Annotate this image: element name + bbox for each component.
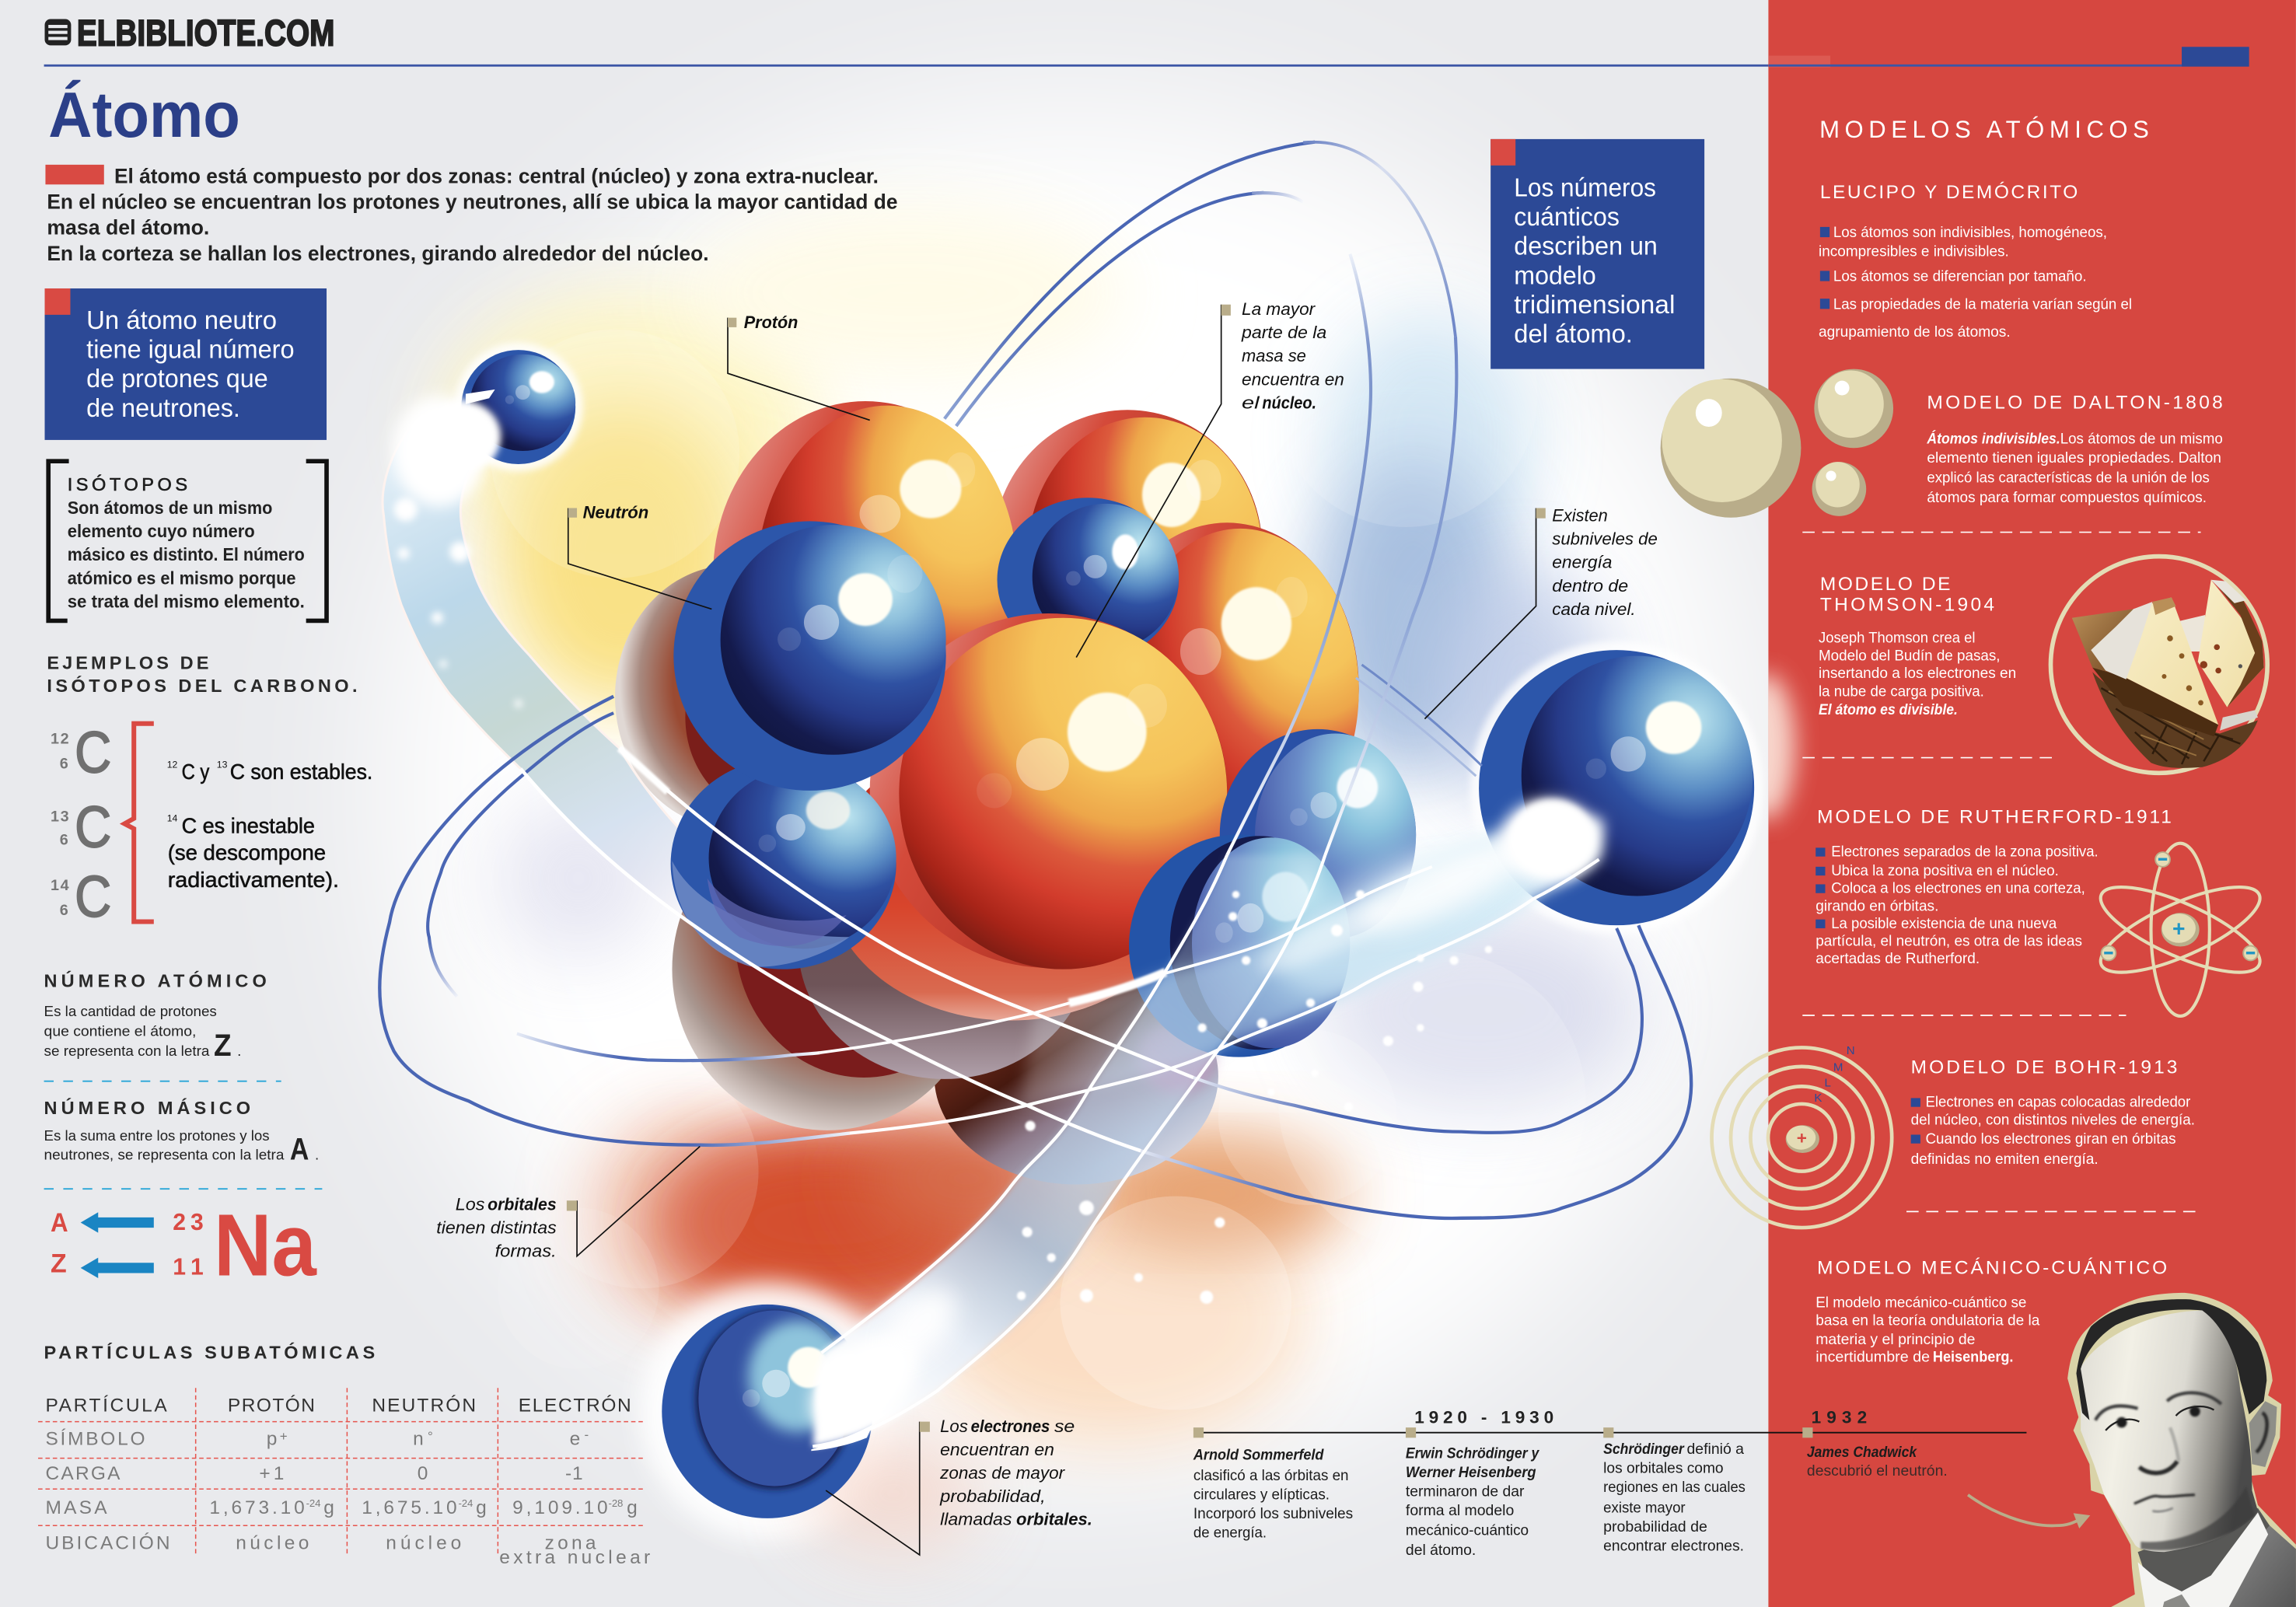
event: chadwick (1807, 1445, 1948, 1479)
arrow: A (81, 1212, 154, 1233)
section: dalton: explicó las características de la unión de los (1927, 470, 2210, 487)
heading: ejemplos de isotopos: ISÓTOPOS DEL CARBONO. (47, 675, 358, 696)
label: nucleus mass: masa se (1242, 346, 1306, 365)
intro text block: El átomo está compuesto por dos zonas: central (núcleo) y zona extra-nuclear. (114, 164, 879, 187)
table: particulas subatomicas: g (323, 1497, 334, 1518)
section: thomson: MODELO DE (1820, 574, 1950, 595)
section: rutherford: Coloca a los electrones en una corteza, (1831, 881, 2085, 897)
label: subniveles: dentro de (1552, 576, 1628, 596)
section: leucipo y democrito: LEUCIPO Y DEMÓCRITO (1820, 182, 2078, 203)
nose (2139, 1461, 2177, 1473)
inner path (428, 713, 613, 997)
icon: rutherford atom: + (2172, 916, 2186, 941)
callout: numeros cuanticos (1490, 139, 1704, 369)
event: chadwick: James Chadwick (1807, 1445, 1917, 1461)
carbon isotopes (51, 719, 111, 929)
label: nucleus mass: núcleo. (1262, 393, 1316, 412)
numero masico: Es la suma entre los protones y los (44, 1127, 270, 1144)
icon: bohr atom: N (1847, 1044, 1855, 1057)
section: leucipo y democrito: Los átomos son indivisibles, homogéneos, (1833, 225, 2107, 241)
carbon isotopes: 13 (51, 808, 69, 825)
section: rutherford: Ubica la zona positiva en el núcleo. (1831, 863, 2059, 879)
table: particulas subatomicas: 1,675.10 (362, 1497, 457, 1518)
callout: numeros cuanticos: modelo (1514, 260, 1596, 289)
label: subniveles: energía (1552, 553, 1612, 572)
numero masico: NÚMERO MÁSICO (44, 1097, 250, 1118)
label: neutron (568, 503, 711, 609)
section: rutherford: MODELO DE RUTHERFORD-1911 (1817, 806, 2172, 827)
event: schrodinger y heisenberg: Erwin Schrödinger y (1406, 1446, 1540, 1462)
electron: top left (393, 343, 583, 507)
label: electrones: encuentran en (940, 1440, 1054, 1459)
label: electrones: llamadas (940, 1509, 1012, 1528)
face (2081, 1310, 2258, 1552)
event: sommerfeld: circulares y elípticas. (1193, 1486, 1330, 1503)
event: sommerfeld: Incorporó los subniveles (1193, 1506, 1353, 1522)
event: orbitales: Schrödinger (1603, 1441, 1685, 1458)
label: electrones: orbitales. (1016, 1509, 1092, 1528)
comet: bottom (813, 855, 1325, 1447)
sodium notation: 11 (173, 1254, 204, 1280)
section: thomson: la nube de carga positiva. (1819, 683, 1984, 700)
logo icon (45, 19, 71, 45)
panel: isotopos: elemento cuyo número (68, 521, 255, 541)
event: schrodinger y heisenberg (1406, 1446, 1540, 1559)
neck (2138, 1508, 2270, 1603)
icon: bohr atom: M (1833, 1061, 1843, 1074)
carbon isotopes: 6 (60, 756, 68, 773)
callout: numeros cuanticos: Los números (1514, 173, 1656, 201)
event: sommerfeld: clasificó a las órbitas en (1193, 1468, 1348, 1484)
event: chadwick: descubrió el neutrón. (1807, 1463, 1948, 1479)
red marker (45, 165, 104, 184)
section: leucipo y democrito (1819, 182, 2132, 341)
isotope notes: C y (182, 760, 210, 784)
arrow: Z (81, 1258, 154, 1278)
date: 1932: 1932 (1812, 1407, 1867, 1427)
heading: modelos atomicos: MODELOS ATÓMICOS (1819, 116, 2149, 143)
proton P3 (1096, 522, 1359, 854)
icon: bohr atom (1712, 1044, 1892, 1228)
brows (2095, 1406, 2138, 1420)
event: sommerfeld: Arnold Sommerfeld (1193, 1448, 1325, 1464)
section: leucipo y democrito: agrupamiento de los átomos. (1819, 324, 2011, 341)
sparkles (1017, 890, 1492, 1304)
carbon isotopes: 14 (51, 877, 69, 894)
left slice crumb (2123, 597, 2218, 725)
isotope notes: 14 (167, 812, 178, 823)
section: rutherford: girando en órbitas. (1815, 898, 1938, 914)
table: particulas subatomicas: ° (428, 1429, 433, 1444)
table: particulas subatomicas (38, 1388, 650, 1568)
heading: ejemplos de isotopos: EJEMPLOS DE (47, 653, 208, 673)
outer path (379, 697, 849, 1145)
label: orbitales: orbitales (488, 1194, 557, 1214)
bokeh (524, 1054, 759, 1288)
table: particulas subatomicas: extra nuclear (499, 1547, 650, 1568)
electron: right (1470, 641, 1763, 934)
event: orbitales: existe mayor (1603, 1500, 1686, 1516)
logo: ELBIBLIOTE.COM (77, 12, 334, 53)
table: particulas subatomicas: e (570, 1429, 580, 1450)
mouth (2134, 1495, 2195, 1504)
hair (2076, 1299, 2266, 1420)
panel: isotopos (48, 461, 327, 620)
label: electrones: Los (940, 1417, 968, 1436)
callout: neutral atom (45, 288, 327, 440)
jaw shading (2140, 1486, 2255, 1550)
numero masico: neutrones, se representa con la letra (44, 1146, 285, 1162)
section: thomson (1819, 574, 2016, 718)
comet ribbon: left (383, 416, 732, 930)
event: sommerfeld (1193, 1448, 1353, 1541)
section: mecanico cuantico: materia y el principio de (1815, 1332, 1976, 1348)
orbit: tall ellipse (813, 142, 1456, 1447)
label: nucleus mass (1076, 299, 1344, 658)
callout: neutral atom: Un átomo neutro (86, 306, 277, 334)
table: particulas subatomicas: 1,673.10 (209, 1497, 305, 1518)
sodium notation: Z (51, 1249, 67, 1279)
section: bohr: del núcleo, con distintos niveles de energía. (1911, 1112, 2195, 1128)
callout: numeros cuanticos: tridimensional (1514, 290, 1675, 319)
table: particulas subatomicas: UBICACIÓN (45, 1532, 170, 1553)
sodium notation: 23 (173, 1210, 204, 1235)
intro text block: masa del átomo. (47, 215, 209, 239)
callout: numeros cuanticos: del átomo. (1514, 320, 1633, 348)
table: particulas subatomicas: núcleo (386, 1532, 461, 1553)
red panel soft glare (1768, 659, 1812, 833)
section: dalton: Los átomos de un mismo (2060, 431, 2223, 448)
orbit: right loop (521, 665, 1691, 1218)
section: mecanico cuantico: Heisenberg. (1933, 1349, 2013, 1365)
callout: numeros cuanticos: cuánticos (1514, 202, 1620, 231)
isotope notes: C son estables. (230, 760, 372, 784)
callout: neutral atom: de neutrones. (86, 393, 240, 422)
label: orbitales (436, 1147, 700, 1261)
label: subniveles: subniveles de (1552, 529, 1658, 549)
numero atomico: NÚMERO ATÓMICO (44, 969, 267, 990)
section: rutherford: acertadas de Rutherford. (1815, 951, 1980, 967)
callout: neutral atom: tiene igual número (86, 334, 295, 363)
numero masico: A (290, 1132, 309, 1166)
jacket (2228, 1524, 2296, 1607)
numero atomico: se representa con la letra (44, 1043, 210, 1059)
event: schrodinger y heisenberg: terminaron de dar (1406, 1484, 1525, 1500)
section: mecanico cuantico: basa en la teoría ondulatoria de la (1815, 1312, 2040, 1329)
label: orbitales: tienen distintas (436, 1218, 557, 1238)
section: thomson: Modelo del Budín de pasas, (1819, 648, 2001, 664)
back sphere bottom (935, 968, 1218, 1185)
carbon isotopes: 6 (60, 832, 68, 849)
event: schrodinger y heisenberg: del átomo. (1406, 1542, 1476, 1559)
table: particulas subatomicas: -28 (609, 1497, 623, 1509)
red brace (124, 724, 154, 921)
sodium notation: A (51, 1208, 68, 1238)
event: schrodinger y heisenberg: forma al modelo (1406, 1503, 1514, 1519)
neutron N1 (673, 521, 946, 791)
proton lower under P4 (827, 736, 1193, 1021)
event: orbitales: probabilidad de (1603, 1519, 1707, 1535)
section: rutherford (1815, 806, 2172, 967)
numero atomico (44, 969, 267, 1063)
icon: bohr atom: K (1814, 1092, 1822, 1105)
table: particulas subatomicas: -24 (306, 1497, 320, 1509)
orbit glare and comets (792, 799, 1603, 1452)
section: bohr: Cuando los electrones giran en órbitas (1925, 1131, 2176, 1148)
section: leucipo y democrito: Los átomos se diferencian por tamaño. (1833, 269, 2087, 285)
basket (2092, 672, 2258, 768)
dalton spheres (1661, 369, 1893, 518)
right slice (2198, 580, 2263, 707)
event: orbitales: los orbitales como (1603, 1460, 1724, 1476)
label: proton: Protón (744, 313, 798, 332)
carbon isotopes: C (75, 864, 111, 929)
section: dalton: Átomos indivisibles. (1926, 431, 2060, 448)
label: electrones: zonas de mayor (939, 1463, 1066, 1483)
table: particulas subatomicas: + (280, 1429, 288, 1444)
header accents (1769, 47, 2249, 68)
timeline (1193, 1407, 2026, 1559)
section: thomson: Joseph Thomson crea el (1819, 631, 1976, 647)
table: particulas subatomicas: 9,109.10 (512, 1497, 608, 1518)
label: orbitales: Los (456, 1194, 484, 1214)
title rule (44, 65, 2182, 67)
panel: isotopos: ISÓTOPOS (68, 474, 187, 494)
event: schrodinger y heisenberg: Werner Heisenberg (1406, 1465, 1536, 1481)
table: particulas subatomicas: núcleo (236, 1532, 309, 1553)
table: particulas subatomicas: -1 (565, 1463, 583, 1484)
table: particulas subatomicas: - (584, 1427, 589, 1442)
event: orbitales: regiones en las cuales (1603, 1479, 1746, 1496)
icon: bohr atom: + (1797, 1129, 1807, 1148)
callout: numeros cuanticos: describen un (1514, 232, 1658, 260)
label: electrones: electrones (971, 1417, 1050, 1436)
event: orbitales: definió a (1687, 1441, 1744, 1458)
table: particulas subatomicas: MASA (45, 1497, 107, 1518)
sodium notation: Na (214, 1196, 317, 1294)
label: nucleus mass: La mayor (1242, 299, 1316, 319)
table: particulas subatomicas: -24 (459, 1497, 473, 1509)
section: thomson: insertando a los electrones en (1819, 666, 2016, 682)
table: particulas subatomicas: g (627, 1497, 638, 1518)
isotope notes: C es inestable (182, 814, 315, 838)
section: bohr: Electrones en capas colocadas alrededor (1925, 1095, 2191, 1111)
section: bohr: MODELO DE BOHR-1913 (1911, 1057, 2177, 1078)
label: nucleus mass: parte de la (1241, 323, 1326, 342)
table: particulas subatomicas: g (476, 1497, 487, 1518)
table: particulas subatomicas: +1 (259, 1463, 284, 1484)
panel: isotopos: Son átomos de un mismo (68, 498, 272, 518)
nucleus back spheres (615, 565, 1218, 1185)
title: Átomo (48, 79, 240, 151)
carbon isotopes: 6 (60, 902, 68, 919)
section: rutherford: La posible existencia de una nueva (1831, 916, 2057, 932)
table: particulas subatomicas: n (413, 1429, 424, 1450)
label: subniveles: Existen (1552, 505, 1608, 525)
label: nucleus mass: el (1242, 393, 1260, 412)
table: particulas subatomicas: PROTÓN (228, 1395, 315, 1416)
isotope notes: 13 (217, 760, 228, 770)
date: 1920-1930: 1920 - 1930 (1414, 1407, 1553, 1427)
eyes (2106, 1420, 2139, 1431)
panel: isotopos: atómico es el mismo porque (68, 568, 295, 588)
cloth (2175, 615, 2205, 652)
arrow: to portrait (1968, 1495, 2090, 1528)
label: electrones (826, 1417, 1092, 1555)
heading: ejemplos de isotopos (47, 653, 358, 696)
section: bohr (1911, 1057, 2195, 1168)
cream outline (2067, 1293, 2296, 1607)
table: particulas subatomicas: NEUTRÓN (372, 1395, 476, 1416)
section: mecanico cuantico: MODELO MECÁNICO-CUÁNTICO (1817, 1257, 2167, 1278)
isotope notes (167, 760, 372, 892)
orbit: lower ellipse (379, 697, 1599, 1145)
icon: bohr atom: L (1825, 1076, 1831, 1089)
table: particulas subatomicas: 0 (418, 1463, 428, 1484)
callout: neutral atom: de protones que (86, 364, 268, 393)
proton P1 (713, 401, 1018, 748)
intro text block (45, 164, 897, 265)
sodium notation (51, 1196, 317, 1294)
table: particulas subatomicas: SÍMBOLO (45, 1429, 145, 1450)
isotope notes: radiactivamente). (168, 868, 339, 892)
proton P2 (993, 410, 1262, 690)
label: electrones: probabilidad, (939, 1486, 1046, 1506)
label: electrones: se (1054, 1417, 1075, 1436)
label: nucleus mass: encuentra en (1242, 369, 1344, 389)
label: neutron: Neutrón (583, 503, 648, 522)
numero atomico: Z (214, 1029, 232, 1063)
table: particulas subatomicas: CARGA (45, 1463, 121, 1484)
section: dalton (1926, 392, 2223, 506)
back sphere lower large (672, 796, 1091, 1130)
neutron N2 (998, 498, 1179, 662)
table: particulas subatomicas: p (267, 1429, 277, 1450)
event: orbitales (1603, 1441, 1746, 1554)
icon: rutherford atom (2091, 844, 2270, 1016)
table: particulas subatomicas: ELECTRÓN (519, 1395, 631, 1416)
panel: isotopos: másico es distinto. El número (68, 544, 305, 564)
section: dalton: MODELO DE DALTON-1808 (1927, 392, 2223, 413)
intro text block: En el núcleo se encuentran los protones y neutrones, allí se ubica la mayor cantidad de (47, 190, 897, 214)
event: orbitales: encontrar electrones. (1603, 1538, 1744, 1554)
carbon isotopes: C (75, 794, 111, 859)
label: proton (728, 313, 870, 420)
tie (2163, 1595, 2190, 1607)
section: dalton: átomos para formar compuestos químicos. (1927, 490, 2207, 506)
section: thomson: THOMSON-1904 (1820, 594, 1994, 615)
numero atomico: que contiene el átomo, (44, 1023, 196, 1039)
table: particulas subatomicas: PARTÍCULA (45, 1395, 167, 1416)
neutron N5 (1129, 834, 1350, 1057)
label: orbitales: formas. (495, 1242, 557, 1261)
numero masico: . (315, 1146, 319, 1162)
section: leucipo y democrito: Las propiedades de la materia varían según el (1833, 296, 2132, 313)
event: sommerfeld: de energía. (1193, 1525, 1267, 1541)
section: bohr: definidas no emiten energía. (1911, 1151, 2099, 1168)
panel: modelos atomicos background (1768, 0, 2296, 1607)
section: rutherford: partícula, el neutrón, es otra de las ideas (1815, 934, 2082, 950)
collar (2138, 1512, 2268, 1607)
electron comet white bites (817, 799, 1593, 1429)
section: mecanico cuantico (1815, 1257, 2167, 1365)
numero masico (44, 1097, 319, 1166)
carbon isotopes: C (75, 719, 111, 784)
table: particulas subatomicas: zona (545, 1532, 596, 1553)
table heading: PARTÍCULAS SUBATÓMICAS (44, 1342, 375, 1363)
electron: bottom (662, 1305, 872, 1518)
section: thomson: El átomo es divisible. (1819, 702, 1958, 718)
intro text block: En la corteza se hallan los electrones, girando alrededor del núcleo. (47, 242, 709, 265)
ear (2249, 1401, 2277, 1467)
isotope notes: (se descompone (168, 840, 326, 865)
section: leucipo y democrito: incompresibles e indivisibles. (1819, 244, 2009, 260)
numero atomico: Es la cantidad de protones (44, 1003, 217, 1019)
numero atomico: . (237, 1043, 241, 1059)
label: subniveles (1424, 505, 1658, 719)
event: schrodinger y heisenberg: mecánico-cuántico (1406, 1523, 1529, 1539)
neutron N4 (1220, 729, 1416, 940)
section: mecanico cuantico: El modelo mecánico-cuántico se (1815, 1295, 2026, 1312)
isotope notes: 12 (167, 760, 178, 770)
portrait: James Chadwick (2067, 1293, 2296, 1607)
neutron N3 (671, 758, 896, 969)
section: rutherford: Electrones separados de la zona positiva. (1831, 844, 2099, 861)
left slice crust (2072, 609, 2133, 676)
section: dalton: elemento tienen iguales propiedades. Dalton (1927, 450, 2221, 466)
photo: raisin bread (2050, 557, 2267, 773)
label: subniveles: cada nivel. (1552, 599, 1636, 619)
proton P4 central (870, 613, 1227, 969)
back sphere left (615, 565, 867, 829)
section: mecanico cuantico: incertidumbre de (1815, 1349, 1930, 1365)
panel: isotopos: se trata del mismo elemento. (68, 592, 305, 612)
carbon isotopes: 12 (51, 731, 69, 748)
comet: right (1021, 818, 1603, 1107)
